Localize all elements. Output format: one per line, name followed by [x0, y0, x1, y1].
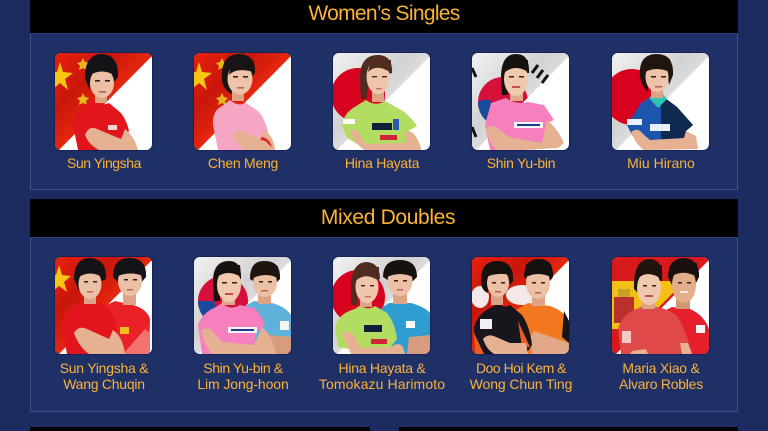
name: Doo Hoi Kem and Wong Chun Ting: [470, 360, 572, 392]
photo: Maria Xiao and Alvaro Robles: [612, 257, 709, 354]
name: Doo Hoi Kem and Wong Chun Ting: Doo Hoi Kem &: [476, 360, 566, 376]
name: Maria Xiao and Alvaro Robles: [619, 360, 703, 392]
photo: Miu Hirano: [612, 53, 709, 150]
photo: Sun Yingsha and Wang Chuqin: [55, 257, 152, 354]
card: Shin Yu-bin: [471, 52, 570, 171]
name: Chen Meng: Chen Meng: [208, 155, 278, 171]
photo: Sun Yingsha: [55, 53, 152, 150]
name: Hina Hayata and Tomokazu Harimoto: Hina Hayata &: [338, 360, 426, 376]
photo: Shin Yu-bin and Lim Jong-hoon: [194, 257, 291, 354]
name: Hina Hayata and Tomokazu Harimoto: Tomokazu Harimoto: [319, 376, 445, 392]
name: Shin Yu-bin and Lim Jong-hoon: Shin Yu-bin &: [203, 360, 283, 376]
panel: Women's Singles players: [30, 33, 738, 190]
card: Maria Xiao and Alvaro Robles: [611, 256, 710, 392]
name: Shin Yu-bin and Lim Jong-hoon: [197, 360, 289, 392]
name: Maria Xiao and Alvaro Robles: Maria Xiao &: [622, 360, 700, 376]
name: Sun Yingsha: Sun Yingsha: [67, 155, 141, 171]
name: Doo Hoi Kem and Wong Chun Ting: Wong Chun Ting: [470, 376, 572, 392]
name: Sun Yingsha and Wang Chuqin: Sun Yingsha &: [60, 360, 148, 376]
card: Hina Hayata and Tomokazu Harimoto: [319, 256, 445, 392]
name: Sun Yingsha and Wang Chuqin: Wang Chuqin: [63, 376, 145, 392]
name: Shin Yu-bin and Lim Jong-hoon: Lim Jong-hoon: [197, 376, 289, 392]
card: Chen Meng: [193, 52, 292, 171]
card: Shin Yu-bin and Lim Jong-hoon: [193, 256, 292, 392]
card: Hina Hayata: [332, 52, 431, 171]
name: Hina Hayata and Tomokazu Harimoto: [319, 360, 445, 392]
photo: Hina Hayata: [333, 53, 430, 150]
name: Shin Yu-bin: Shin Yu-bin: [487, 155, 555, 171]
photo: Hina Hayata and Tomokazu Harimoto: [333, 257, 430, 354]
photo: Shin Yu-bin: [472, 53, 569, 150]
card: Sun Yingsha and Wang Chuqin: [54, 256, 153, 392]
panel: Mixed Doubles pairs: [30, 237, 738, 412]
card: Miu Hirano: [611, 52, 710, 171]
heading: Women's Singles: Women’s Singles: [308, 2, 460, 25]
name: Miu Hirano: Miu Hirano: [627, 155, 695, 171]
heading: Mixed Doubles: [30, 199, 738, 237]
photo: Chen Meng: [194, 53, 291, 150]
name: Hina Hayata: Hina Hayata: [345, 155, 419, 171]
card: Sun Yingsha: [54, 52, 153, 171]
heading: Mixed Doubles: Mixed Doubles: [321, 206, 455, 229]
photo: Doo Hoi Kem and Wong Chun Ting: [472, 257, 569, 354]
name: Sun Yingsha and Wang Chuqin: [60, 360, 148, 392]
next section header: right: [399, 427, 738, 431]
next section header: left: [30, 427, 370, 431]
card: Doo Hoi Kem and Wong Chun Ting: [470, 256, 572, 392]
name: Maria Xiao and Alvaro Robles: Alvaro Robles: [619, 376, 703, 392]
heading: Women's Singles: [30, 0, 738, 33]
